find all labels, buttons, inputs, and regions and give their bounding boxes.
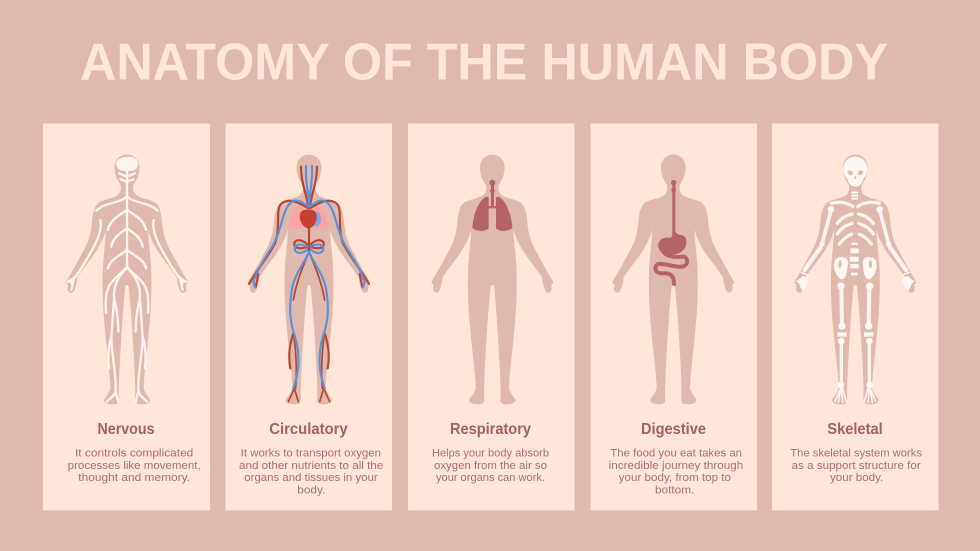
description: nervous: processes like movement, — [68, 460, 201, 472]
card background — [408, 124, 574, 510]
description: circulatory: organs and tissues in your — [244, 472, 378, 484]
card background — [226, 124, 392, 510]
description: digestive: your body, from top to — [619, 472, 731, 484]
heading: Skeletal: Skeletal — [827, 421, 883, 438]
description: nervous: It controls complicated — [75, 448, 193, 460]
description: respiratory: your organs can work. — [436, 472, 545, 484]
description: digestive: bottom. — [655, 484, 694, 496]
description: respiratory: oxygen from the air so — [434, 460, 547, 472]
description: digestive: incredible journey through — [609, 460, 743, 472]
card background — [43, 124, 210, 510]
title: ANATOMY OF THE HUMAN BODY — [80, 34, 888, 92]
heading: Nervous: Nervous — [98, 421, 154, 438]
description: respiratory: Helps your body absorb — [432, 448, 549, 460]
figure: skeletal system — [794, 155, 916, 404]
description: circulatory: and other nutrients to all the — [239, 460, 383, 472]
heading: Respiratory: Respiratory — [450, 421, 531, 438]
description: skeletal: as a support structure for — [792, 460, 921, 472]
panel: skeletal — [772, 124, 938, 510]
description: circulatory: It works to transport oxygen — [241, 448, 381, 460]
heading: Digestive: Digestive — [641, 421, 706, 438]
description: skeletal: The skeletal system works — [790, 448, 923, 460]
description: digestive: The food you eat takes an — [610, 448, 742, 460]
panel: digestive — [590, 124, 757, 510]
panel: circulatory — [226, 124, 392, 510]
description: nervous: thought and memory. — [78, 472, 190, 484]
description: circulatory: body. — [297, 484, 325, 496]
figure: nervous system — [66, 155, 188, 404]
card background — [772, 124, 938, 510]
card background — [590, 124, 757, 510]
heading: Circulatory: Circulatory — [269, 421, 348, 438]
figure: respiratory system — [431, 155, 553, 404]
description: skeletal: your body. — [830, 472, 883, 484]
figure: digestive system — [612, 155, 734, 404]
figure: circulatory system — [248, 155, 370, 404]
panel: respiratory — [408, 124, 574, 510]
panel: nervous — [43, 124, 210, 510]
